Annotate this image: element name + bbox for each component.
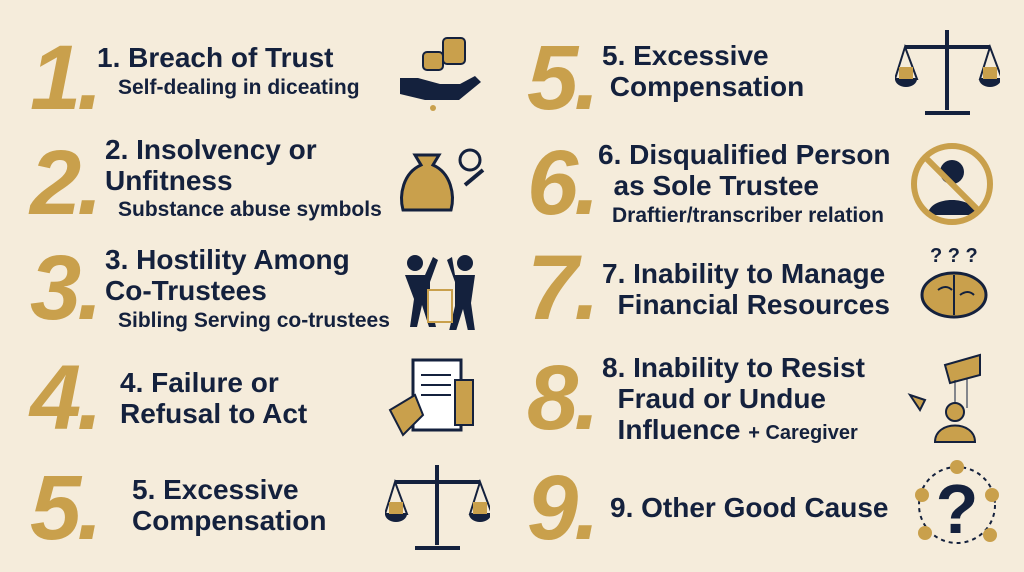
item 6 subtitle: Draftier/transcriber relation: [612, 204, 884, 227]
item 8 title: [602, 352, 865, 445]
number 8: 8.: [527, 347, 596, 449]
item 8 title: Fraud or Undue: [618, 383, 826, 414]
icon: brain: [920, 245, 988, 318]
item 5 left title: 5. Excessive: [132, 474, 299, 505]
number 9: 9.: [527, 457, 596, 559]
number 2: 2.: [30, 132, 99, 234]
icon: hand with coins: [400, 37, 481, 111]
item 5 left title: Compensation: [132, 505, 326, 536]
number 5 left: 5.: [30, 457, 99, 559]
item 8 title: Influence + Caregiver: [618, 414, 858, 445]
item 6 title: as Sole Trustee: [614, 170, 819, 201]
number 5 right: 5.: [527, 27, 596, 129]
icon: money bag: [400, 148, 484, 212]
item 4 title: [120, 367, 307, 429]
number 7: 7.: [527, 237, 596, 339]
item 5 right title: [602, 40, 804, 102]
item 7 title: [602, 258, 890, 320]
item 3 title: Co-Trustees: [105, 275, 267, 306]
item 6 title: [598, 139, 891, 201]
icon: document with hands: [388, 358, 474, 437]
icon: puppet hand: [908, 354, 981, 443]
icon: scales left: [385, 465, 490, 550]
item 2 title: [105, 134, 317, 196]
item 3 title: [105, 244, 350, 306]
item 5 right title: 5. Excessive: [602, 40, 769, 71]
item 9 title: 9. Other Good Cause: [610, 492, 888, 523]
icon: arguing people: [405, 255, 475, 330]
item 3 title: 3. Hostility Among: [105, 244, 350, 275]
item 1 subtitle: Self-dealing in diceating: [118, 76, 360, 99]
number 6: 6.: [527, 132, 596, 234]
icon: scales right: [895, 30, 1000, 115]
number 3: 3.: [30, 237, 99, 339]
item 6 title: 6. Disqualified Person: [598, 139, 891, 170]
number 4: 4.: [30, 347, 99, 449]
icon: prohibited person: [911, 143, 993, 225]
item 5 left title: [132, 474, 326, 536]
icon: question mark circle: ?: [936, 470, 978, 548]
item 8 title: 8. Inability to Resist: [602, 352, 865, 383]
icon: brain: ? ? ?: [930, 245, 978, 267]
item 7 title: 7. Inability to Manage: [602, 258, 885, 289]
item 4 title: Refusal to Act: [120, 398, 307, 429]
item 5 right title: Compensation: [610, 71, 804, 102]
item 2 subtitle: Substance abuse symbols: [118, 198, 382, 221]
item 3 subtitle: Sibling Serving co-trustees: [118, 309, 390, 332]
item 2 title: Unfitness: [105, 165, 233, 196]
icon: question mark circle: [915, 460, 999, 548]
item 1 title: 1. Breach of Trust: [97, 42, 334, 73]
item 7 title: Financial Resources: [618, 289, 890, 320]
number 1: 1.: [30, 27, 99, 129]
item 2 title: 2. Insolvency or: [105, 134, 317, 165]
item 4 title: 4. Failure or: [120, 367, 279, 398]
